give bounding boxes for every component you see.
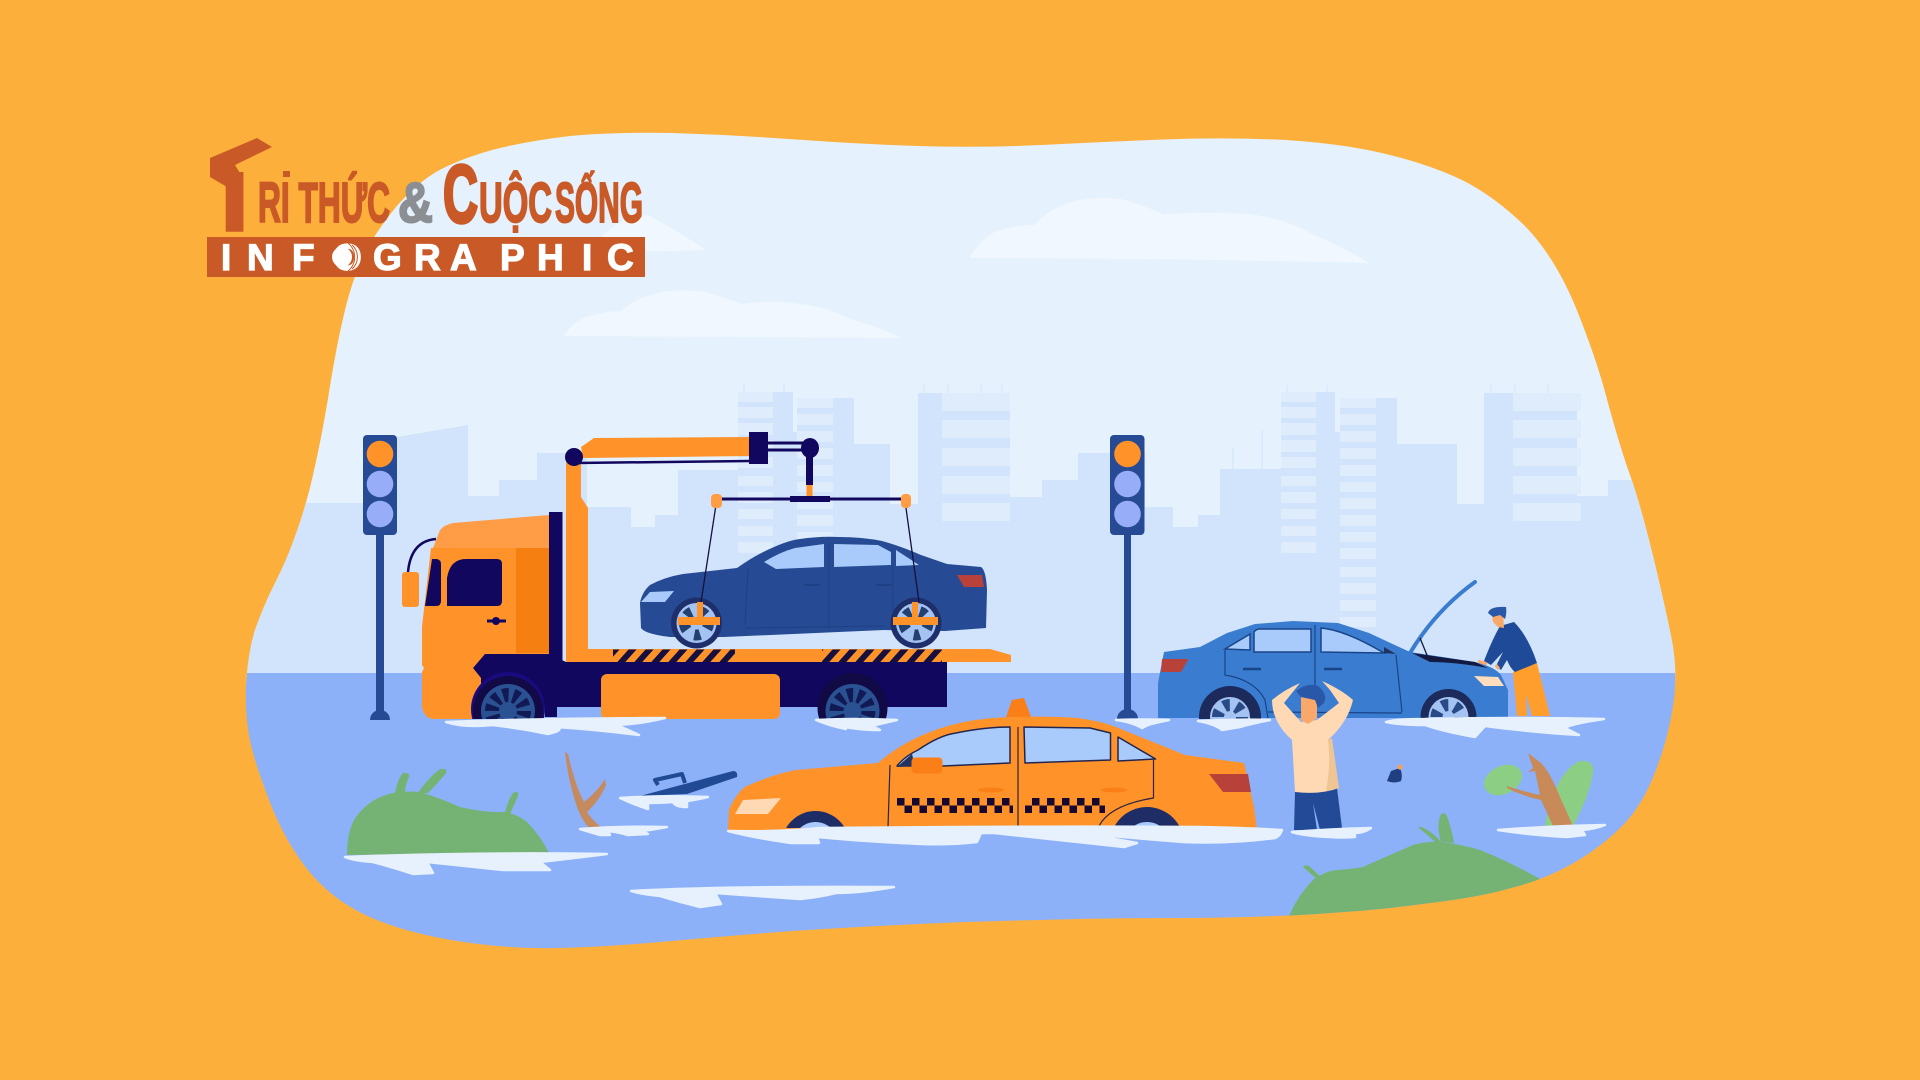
logo words: Tri thức: RI THỨC <box>258 171 390 235</box>
navy car on tow truck <box>640 508 987 648</box>
logo letter T: T <box>197 122 272 259</box>
logo words: Cuộc sống <box>443 149 643 240</box>
logo words: Cuộc sống: C <box>443 149 478 240</box>
mirror arm <box>408 539 436 572</box>
stranded man <box>1272 681 1353 830</box>
chassis <box>473 654 947 717</box>
logo words: Cuộc sống: SỐNG <box>555 170 643 235</box>
cab windows <box>447 559 502 606</box>
taxi wheels <box>782 807 1184 881</box>
branch foam <box>580 827 667 835</box>
blue car with open hood <box>1158 580 1508 719</box>
door handles <box>978 788 1004 792</box>
blue car lights <box>1474 676 1504 686</box>
flood scene blob <box>240 125 1690 953</box>
cab <box>422 548 549 719</box>
mechanic <box>1478 607 1550 716</box>
tree foam <box>1498 825 1605 837</box>
logo ampersand: & <box>398 171 433 235</box>
cab rear panel <box>516 548 549 653</box>
blue car water foam <box>1116 718 1604 737</box>
tow truck <box>402 432 1011 746</box>
logo words: Cuộc sống: UỘC <box>479 170 552 235</box>
city skyline <box>240 384 1690 680</box>
debris foam <box>620 796 708 809</box>
taxi <box>728 698 1257 881</box>
engine bay <box>1412 653 1488 668</box>
bottom water foam <box>631 887 894 907</box>
car lights <box>641 591 674 602</box>
rear wheel <box>818 673 888 719</box>
flood water <box>240 673 1685 953</box>
small floating object <box>1387 764 1403 782</box>
taxi door lines <box>888 727 1154 827</box>
taxi mirror <box>912 758 942 774</box>
left bush foam <box>345 853 607 874</box>
right bush <box>1289 813 1540 916</box>
cab post <box>549 512 562 664</box>
crane arm <box>581 437 750 458</box>
floating debris <box>640 771 737 796</box>
taxi water foam <box>728 827 1282 847</box>
side tool box <box>601 674 780 719</box>
stranded man foam <box>1292 828 1371 838</box>
taxi windows <box>897 727 1156 766</box>
spreader bar <box>721 498 902 500</box>
broken tree <box>1479 753 1593 826</box>
blue car wheels <box>1199 686 1476 748</box>
blue car door lines <box>1225 625 1402 718</box>
infographic banner: INFOGRAPHIC <box>221 237 634 278</box>
door lines <box>745 544 893 628</box>
lift cables <box>701 508 919 602</box>
wheel straps <box>678 602 938 625</box>
crane column <box>566 455 1011 662</box>
logo: Tri thức & Cuộc sống Infographic <box>197 122 645 278</box>
car windows <box>764 544 919 569</box>
left bush <box>347 769 549 855</box>
logo words: Tri thức <box>258 171 390 235</box>
door handle <box>487 620 506 622</box>
bare branch <box>565 752 606 827</box>
right traffic light <box>1110 435 1144 719</box>
sky <box>240 125 1685 685</box>
car wheels <box>671 598 942 648</box>
hazard stripes <box>613 650 942 662</box>
front wheel <box>471 672 545 719</box>
side mirror <box>402 572 419 607</box>
taxi lights <box>735 798 781 814</box>
taxi checker stripe <box>897 798 1105 813</box>
clouds <box>564 198 1369 338</box>
left traffic light <box>363 435 397 720</box>
truck water foam <box>446 718 897 735</box>
blue car windows <box>1225 628 1384 653</box>
cab roof <box>433 515 549 548</box>
